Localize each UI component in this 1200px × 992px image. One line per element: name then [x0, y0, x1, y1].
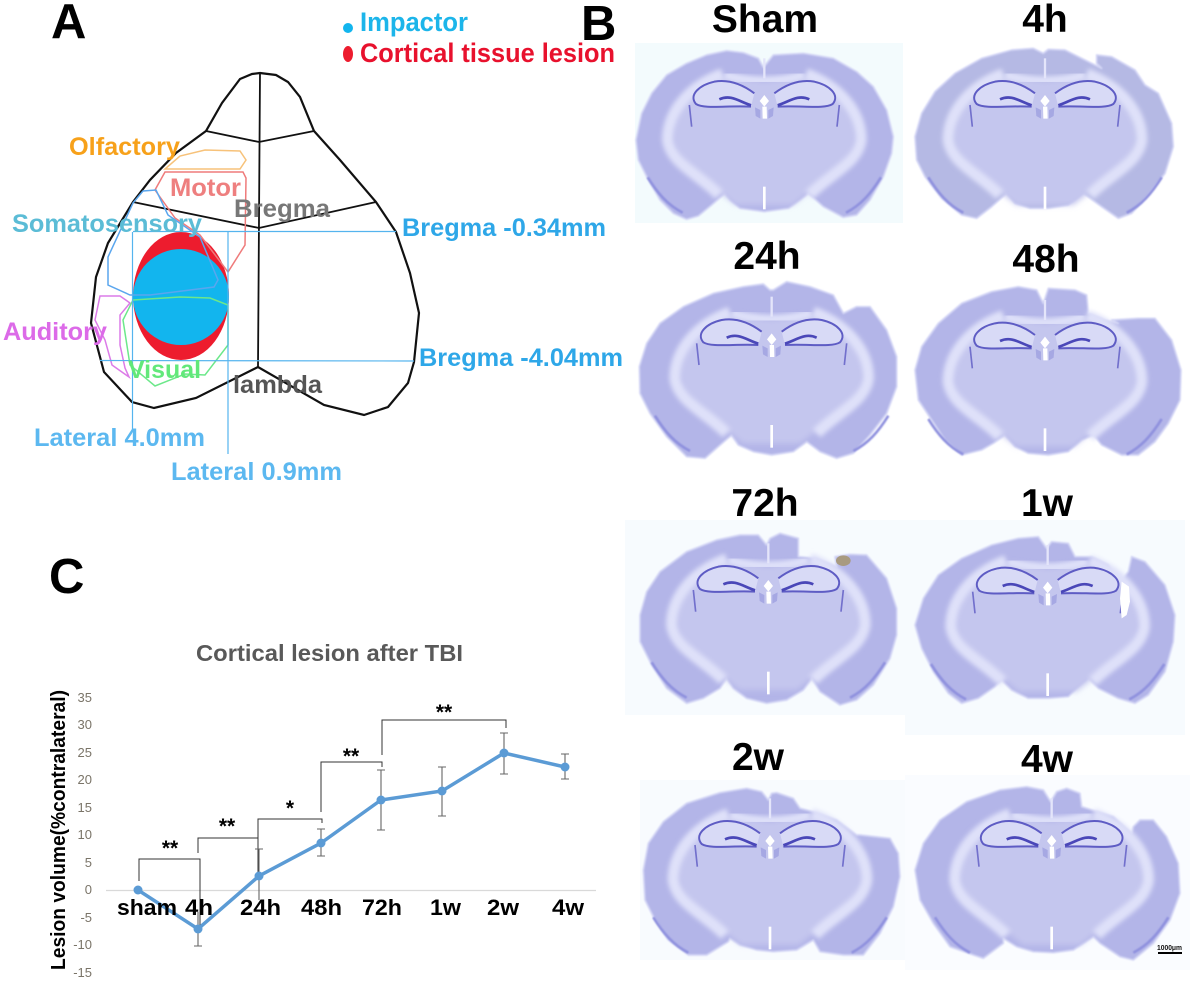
legend label: impactor: Impactor [360, 7, 468, 37]
section: 2w: 2w [732, 736, 785, 779]
impactor circle [133, 249, 229, 345]
y-axis ticks: 35 [78, 690, 92, 705]
lesion cavity [1120, 582, 1130, 618]
section: 4w [905, 738, 1190, 970]
significance stars: ** [219, 815, 236, 838]
panel B: tissue sections [625, 0, 1190, 970]
x-axis labels: 2w [487, 895, 520, 920]
panel A: skull diagram [3, 73, 623, 486]
significance stars: ** [162, 837, 179, 860]
y-axis ticks [73, 690, 92, 980]
x-axis labels: 4w [552, 895, 585, 920]
y-axis ticks: 5 [85, 855, 92, 870]
section: 4h [915, 0, 1173, 218]
label: Bregma -0.34mm: Bregma -0.34mm [402, 214, 606, 242]
y-axis ticks: 15 [78, 800, 92, 815]
section: 24h [639, 235, 897, 458]
significance brackets [139, 720, 506, 930]
x-axis labels [117, 895, 585, 920]
label: Motor: Motor [170, 174, 241, 202]
coordinate guide lines [100, 232, 414, 454]
lesion ellipse [133, 232, 229, 360]
x-axis labels: 4h [185, 895, 213, 920]
significance stars: ** [436, 701, 453, 724]
significance stars: * [286, 797, 295, 820]
section: 1w: 1w [1021, 482, 1074, 525]
x-axis labels: 24h [240, 895, 281, 920]
region: auditory outline [95, 296, 130, 377]
section: 24h: 24h [733, 235, 801, 278]
icon: impactor dot [343, 23, 353, 33]
section: 48h: 48h [1012, 238, 1080, 281]
y-axis ticks: 30 [78, 717, 92, 732]
label: Olfactory: Olfactory [69, 133, 180, 161]
significance stars: ** [343, 745, 360, 768]
y-axis title: Lesion volume(%contralateral) [48, 690, 70, 970]
label: lambda: lambda [233, 371, 323, 399]
data line [138, 753, 565, 929]
region: olfactory outline [165, 150, 246, 169]
section: 2w [640, 736, 905, 960]
section: 4w: 4w [1021, 738, 1074, 781]
significance stars [162, 701, 453, 860]
region: visual outline [123, 297, 228, 386]
y-axis ticks: 25 [78, 745, 92, 760]
section: 72h [625, 482, 910, 715]
region: somatosensory outline [108, 190, 218, 295]
icon: lesion ellipse [343, 46, 353, 62]
label: Visual: Visual [128, 356, 201, 384]
scale bar: 1000μm [1157, 943, 1182, 952]
legend [343, 7, 615, 68]
error bars [194, 733, 569, 946]
lesion debris [836, 555, 851, 566]
label: Somatosensory: Somatosensory [12, 210, 202, 238]
chart title: Cortical lesion after TBI [196, 640, 463, 666]
y-axis ticks: 20 [78, 772, 92, 787]
label: Lateral 4.0mm: Lateral 4.0mm [34, 424, 205, 452]
y-axis ticks: -5 [80, 910, 92, 925]
legend label: lesion: Cortical tissue lesion [360, 38, 615, 68]
x-axis labels: 1w [430, 895, 462, 920]
panel C: line chart [48, 640, 596, 980]
label: Bregma -4.04mm: Bregma -4.04mm [419, 344, 623, 372]
y-axis ticks: 0 [85, 882, 92, 897]
x-axis labels: 48h [301, 895, 342, 920]
y-axis ticks: -15 [73, 965, 92, 980]
label: Auditory: Auditory [3, 318, 107, 346]
region: motor outline [155, 172, 246, 272]
skull outline [91, 73, 419, 415]
section: 1w [905, 482, 1185, 735]
section: Sham [635, 0, 903, 223]
y-axis ticks: 10 [78, 827, 92, 842]
label: Lateral 0.9mm: Lateral 0.9mm [171, 458, 342, 486]
section: 72h: 72h [731, 482, 799, 525]
x-axis labels: sham [117, 895, 177, 920]
y-axis ticks: -10 [73, 937, 92, 952]
x-axis labels: 72h [362, 895, 402, 920]
label: Bregma: Bregma [234, 195, 331, 223]
section: 48h [915, 238, 1181, 455]
suture lines [133, 73, 376, 367]
panel label: C: C [49, 550, 84, 604]
data points [134, 748, 570, 934]
zero axis [106, 890, 596, 892]
